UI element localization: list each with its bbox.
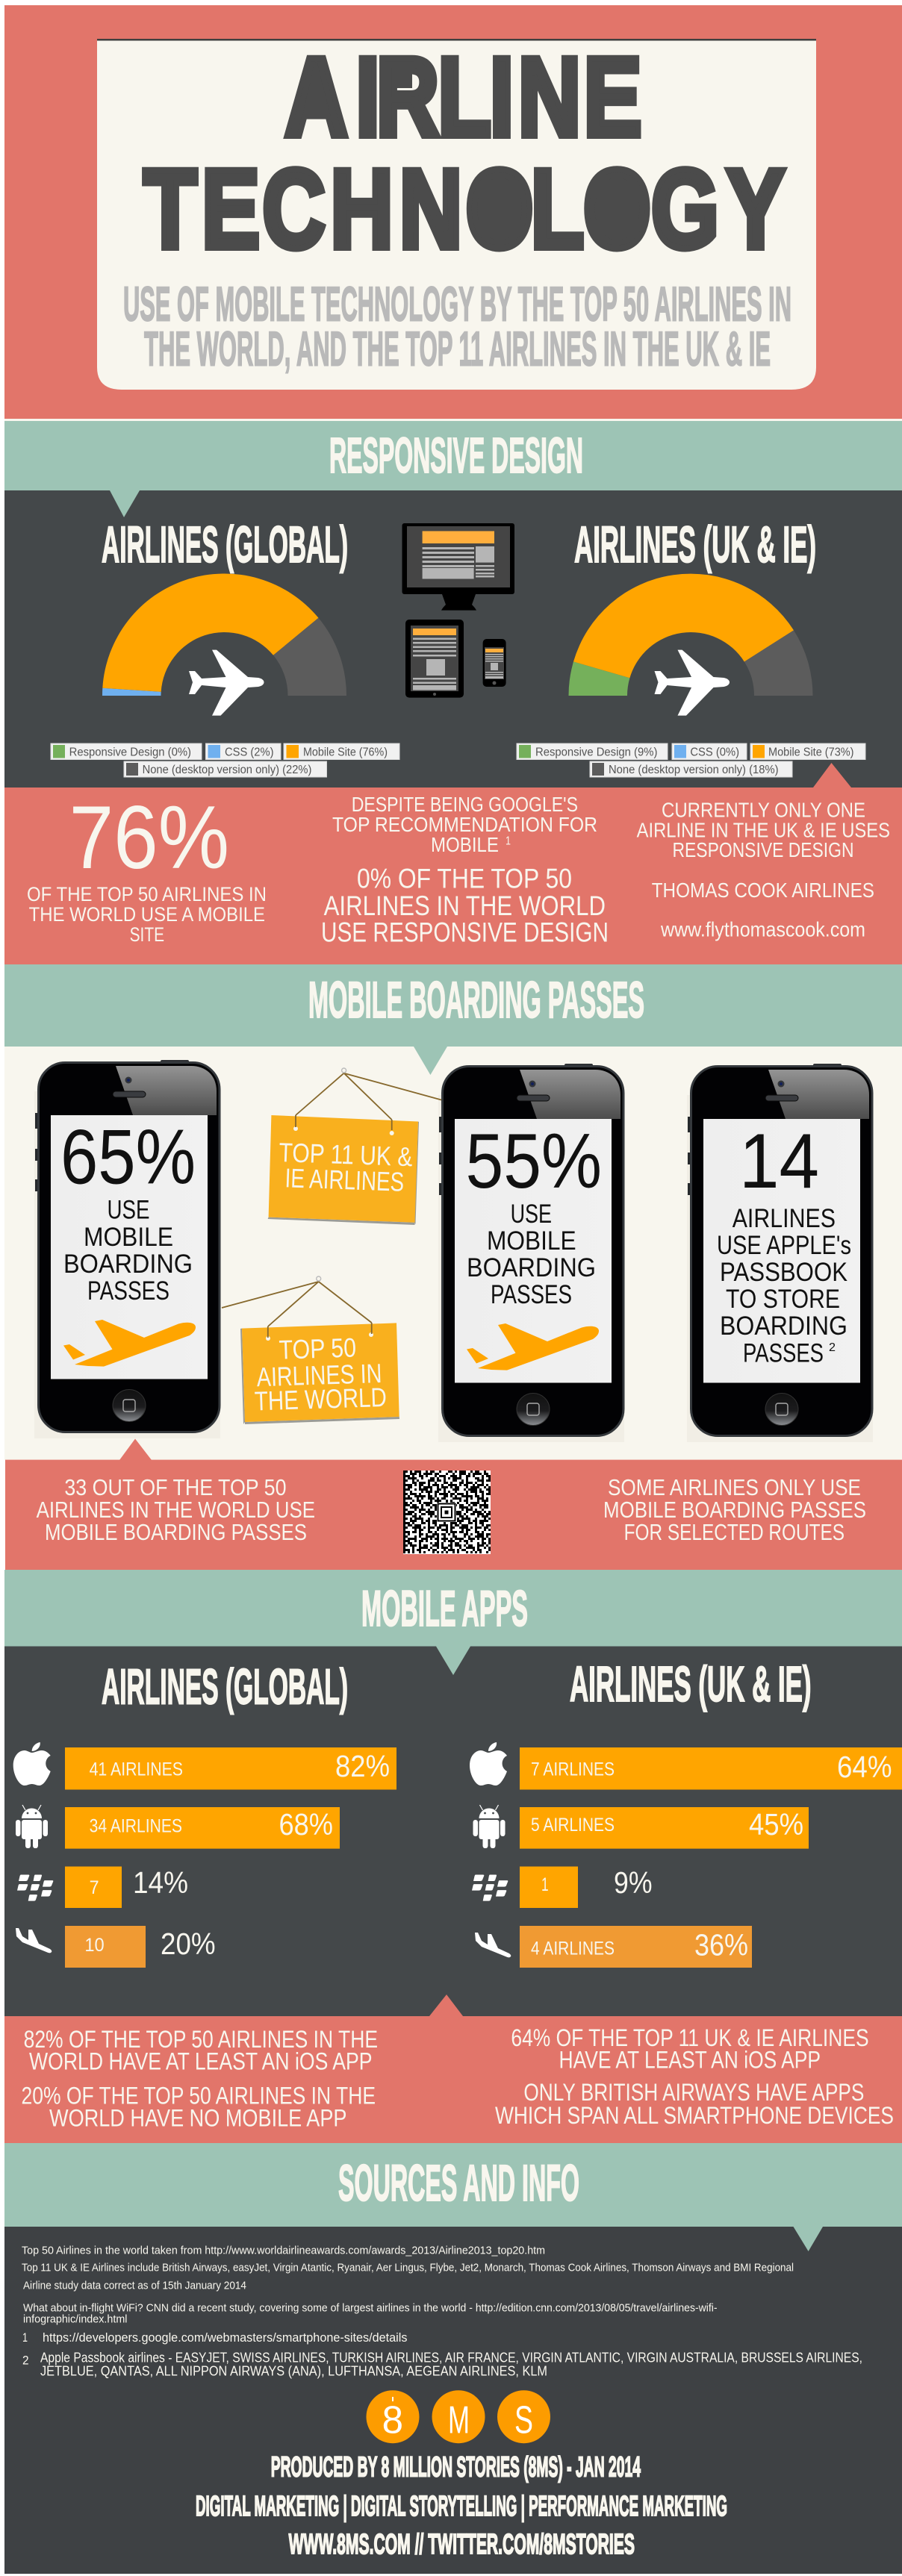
phone: top 11 airlines 55 percent: USE xyxy=(511,1200,552,1229)
text: uk and ie app facts: HAVE AT LEAST AN iOS APP xyxy=(559,2047,821,2074)
panel: sources and info xyxy=(4,2143,902,2574)
text: global app facts: 82% OF THE TOP 50 AIRLINES IN THE xyxy=(24,2026,378,2053)
gauge chart: uk and ie xyxy=(569,574,812,716)
footnote 2: JETBLUE, QANTAS, ALL NIPPON AIRWAYS (ANA), LUFTHANSA, AEGEAN AIRLINES, KLM xyxy=(40,2364,547,2379)
text: 33 out of 50 xyxy=(37,1474,315,1545)
text: uk and ie app facts xyxy=(495,2024,894,2129)
phone: top 11 airlines 55 percent: BOARDING xyxy=(467,1253,596,1282)
bar chart: uk and ie apps: 36% xyxy=(694,1927,748,1962)
legend: uk and ie: Responsive Design (9%) xyxy=(535,746,657,758)
stat: 76 percent: SITE xyxy=(130,923,164,946)
bar chart: global apps: 34 AIRLINES xyxy=(90,1816,182,1837)
heading: airlines global: AIRLINES (GLOBAL) xyxy=(102,1659,348,1715)
icon: phone xyxy=(483,639,506,687)
title card xyxy=(97,34,816,390)
phone: top 50 airlines 65 percent: BOARDING xyxy=(63,1250,193,1279)
bar chart: global apps: 7 xyxy=(90,1877,99,1898)
logo: 8ms circles xyxy=(366,2390,550,2443)
text: google recommendation: MOBILE xyxy=(431,833,499,856)
text: global app facts xyxy=(21,2026,378,2132)
legend: global: None (desktop version only) (22%) xyxy=(143,764,311,776)
text: selected routes: FOR SELECTED ROUTES xyxy=(624,1519,845,1545)
banner pointer xyxy=(793,2227,823,2251)
text: source notes: What about in-flight WiFi? CNN did a recent study, covering some of largest airlines in the world - http://edition.cnn.com/2013/08/05/travel/airlines-wifi- xyxy=(23,2301,718,2314)
phone: passbook 14 airlines: PASSES xyxy=(743,1339,824,1367)
phone: top 11 airlines 55 percent xyxy=(438,1064,624,1442)
text: thomas cook: CURRENTLY ONLY ONE xyxy=(662,799,865,821)
text: source notes: Top 50 Airlines in the world taken from http://www.worldairlineawards.com/awards_2013/Airline2013_top20.htm xyxy=(22,2244,545,2257)
text: global app facts: WORLD HAVE NO MOBILE APP xyxy=(49,2105,346,2132)
bar chart: uk and ie apps: 7 AIRLINES xyxy=(531,1759,615,1780)
phone: top 50 airlines 65 percent: MOBILE xyxy=(84,1223,173,1252)
section banner xyxy=(4,421,902,490)
text: google recommendation: 1 xyxy=(506,835,511,848)
section banner: RESPONSIVE DESIGN xyxy=(329,428,583,484)
stat: 76 percent: 76% xyxy=(69,788,229,888)
hanging sign: top 11 uk and ie airlines: TOP 11 UK & xyxy=(279,1137,413,1172)
bar chart: global apps: 41 AIRLINES xyxy=(90,1759,183,1780)
icon: apple xyxy=(470,1742,507,1786)
text: thomas cook xyxy=(637,799,890,941)
barcode xyxy=(403,1471,491,1554)
web links: WWW.8MS.COM // TWITTER.COM/8MSTORIES xyxy=(289,2529,635,2560)
subtitle xyxy=(123,276,791,376)
bar chart: uk and ie apps: 9% xyxy=(614,1865,653,1900)
hanging sign: top 50 airlines in the world: THE WORLD xyxy=(254,1382,387,1417)
hanging sign: top 50 airlines in the world xyxy=(222,1276,399,1424)
bar chart: uk and ie apps: 64% xyxy=(837,1750,892,1784)
text: google recommendation: AIRLINES IN THE WORLD xyxy=(324,891,606,921)
text: 33 out of 50: MOBILE BOARDING PASSES xyxy=(45,1519,307,1545)
icon: no app plane xyxy=(16,1928,52,1953)
phone: passbook 14 airlines xyxy=(687,1064,873,1442)
section banner xyxy=(4,2143,902,2227)
phone: passbook 14 airlines: AIRLINES xyxy=(733,1204,836,1233)
callout band: boarding pass facts xyxy=(5,1439,902,1570)
hanging sign: top 50 airlines in the world: TOP 50 xyxy=(279,1332,357,1365)
text: google recommendation: DESPITE BEING GOOGLE'S xyxy=(352,793,578,816)
banner pointer xyxy=(414,1047,447,1075)
icon: desktop monitor xyxy=(402,523,514,611)
text: google recommendation: USE RESPONSIVE DESIGN xyxy=(321,917,609,948)
bar chart: uk and ie apps xyxy=(470,1742,902,1968)
title: technology: TECHNOLOGY xyxy=(143,146,785,272)
logo: 8ms circles: 8 xyxy=(382,2399,403,2442)
stat: 76 percent: OF THE TOP 50 AIRLINES IN xyxy=(27,883,267,905)
text: 33 out of 50: 33 OUT OF THE TOP 50 xyxy=(64,1474,287,1500)
icon: apple xyxy=(13,1742,51,1786)
bar chart: uk and ie apps: 5 AIRLINES xyxy=(531,1815,615,1836)
legend: uk and ie: CSS (0%) xyxy=(690,746,739,758)
title letter fills xyxy=(302,63,639,240)
phone: top 11 airlines 55 percent: MOBILE xyxy=(487,1226,576,1256)
section banner xyxy=(4,1570,902,1647)
icon: no app plane xyxy=(475,1933,511,1957)
footnote 2 xyxy=(22,2350,862,2379)
legend: uk and ie: Mobile Site (73%) xyxy=(768,746,854,758)
phone: passbook 14 airlines: TO STORE xyxy=(726,1285,840,1314)
section banner: MOBILE APPS xyxy=(361,1580,528,1637)
bar chart: global apps: 14% xyxy=(133,1865,188,1900)
legend: global: Mobile Site (76%) xyxy=(303,746,388,758)
text: global app facts: 20% OF THE TOP 50 AIRLINES IN THE xyxy=(21,2082,376,2109)
text: source notes: Top 11 UK & IE Airlines include British Airways, easyJet, Virgin Atantic, Ryanair, Aer Lingus, Flybe, Jet2, Monarch, Thomas Cook Airlines, Thomson Airways and BMI Regional xyxy=(22,2261,794,2274)
text: source notes: infographic/index.html xyxy=(23,2313,127,2326)
bar chart: uk and ie apps: 45% xyxy=(749,1807,803,1841)
stat: 76 percent xyxy=(27,788,267,946)
phone: top 50 airlines 65 percent: PASSES xyxy=(87,1276,169,1306)
text: selected routes: SOME AIRLINES ONLY USE xyxy=(608,1474,861,1500)
icon: android xyxy=(16,1805,48,1848)
bar chart: global apps: 20% xyxy=(161,1927,216,1961)
panel: title header xyxy=(4,5,902,421)
bar chart: global apps: 10 xyxy=(84,1935,105,1956)
text: global app facts: WORLD HAVE AT LEAST AN iOS APP xyxy=(29,2048,372,2075)
panel: mobile apps xyxy=(4,1570,902,2143)
icon: blackberry xyxy=(472,1875,508,1901)
legend: global xyxy=(51,743,399,777)
footnote 1: 1 xyxy=(22,2330,28,2345)
gauge chart: global xyxy=(102,573,346,716)
section banner xyxy=(4,964,902,1047)
legend: uk and ie: None (desktop version only) (18%) xyxy=(609,764,778,776)
bar chart: global apps: 68% xyxy=(279,1807,333,1841)
footnote 2: 2 xyxy=(22,2354,29,2368)
panel: responsive design: AIRLINES (GLOBAL) xyxy=(102,516,348,573)
phone: passbook 14 airlines: 14 xyxy=(739,1118,819,1205)
phone: top 11 airlines 55 percent: PASSES xyxy=(491,1280,572,1309)
icon: tablet xyxy=(405,620,464,698)
icon: android xyxy=(473,1805,505,1848)
text: google recommendation: 0% OF THE TOP 50 xyxy=(357,864,572,894)
phone: passbook 14 airlines: 2 xyxy=(829,1341,836,1354)
callout band: responsive stats xyxy=(4,763,902,964)
banner pointer xyxy=(110,490,140,517)
phone: top 50 airlines 65 percent: USE xyxy=(108,1196,149,1225)
legend: uk and ie xyxy=(517,743,865,777)
callout band: app facts xyxy=(4,1995,902,2143)
text: google recommendation: TOP RECOMMENDATION FOR xyxy=(332,813,597,836)
section banner: SOURCES AND INFO xyxy=(338,2154,579,2212)
legend: global: Responsive Design (0%) xyxy=(69,746,191,758)
footnote 1: https://developers.google.com/webmasters/smartphone-sites/details xyxy=(43,2330,408,2345)
icon: blackberry xyxy=(17,1875,53,1901)
phone: top 50 airlines 65 percent: 65% xyxy=(60,1114,196,1201)
logo: 8ms circles: S xyxy=(514,2399,533,2442)
phone: passbook 14 airlines: USE APPLE's xyxy=(717,1231,851,1260)
bar chart: uk and ie apps: 4 AIRLINES xyxy=(531,1938,615,1959)
phone: top 11 airlines 55 percent: 55% xyxy=(466,1118,602,1205)
panel: responsive design xyxy=(4,421,902,964)
text: 33 out of 50: AIRLINES IN THE WORLD USE xyxy=(37,1497,315,1523)
phone: top 50 airlines 65 percent xyxy=(34,1060,220,1438)
text: source notes xyxy=(22,2244,794,2326)
text: thomas cook: RESPONSIVE DESIGN xyxy=(672,838,854,861)
phone: passbook 14 airlines: BOARDING xyxy=(720,1312,847,1341)
logo: 8ms circles: M xyxy=(448,2399,470,2442)
title: airline: AIRLINE xyxy=(284,34,642,160)
hanging sign: top 50 airlines in the world: AIRLINES IN xyxy=(256,1358,382,1392)
legend: global: CSS (2%) xyxy=(225,746,273,758)
hanging sign: top 11 uk and ie airlines xyxy=(268,1068,441,1225)
phone: passbook 14 airlines: PASSBOOK xyxy=(720,1258,847,1287)
bar chart: global apps: 82% xyxy=(335,1749,390,1783)
banner pointer xyxy=(436,1647,470,1675)
text: thomas cook: THOMAS COOK AIRLINES xyxy=(652,879,874,902)
text: source notes: Airline study data correct as of 15th January 2014 xyxy=(23,2280,246,2292)
text: google recommendation xyxy=(321,793,609,948)
bar chart: uk and ie apps: 1 xyxy=(541,1874,549,1895)
text: selected routes xyxy=(603,1474,866,1545)
hanging sign: top 11 uk and ie airlines: IE AIRLINES xyxy=(284,1162,405,1197)
panel: mobile boarding passes xyxy=(4,964,902,1570)
bar chart: global apps xyxy=(13,1742,396,1968)
stat: 76 percent: THE WORLD USE A MOBILE xyxy=(29,903,265,926)
text: thomas cook: www.flythomascook.com xyxy=(660,918,865,941)
